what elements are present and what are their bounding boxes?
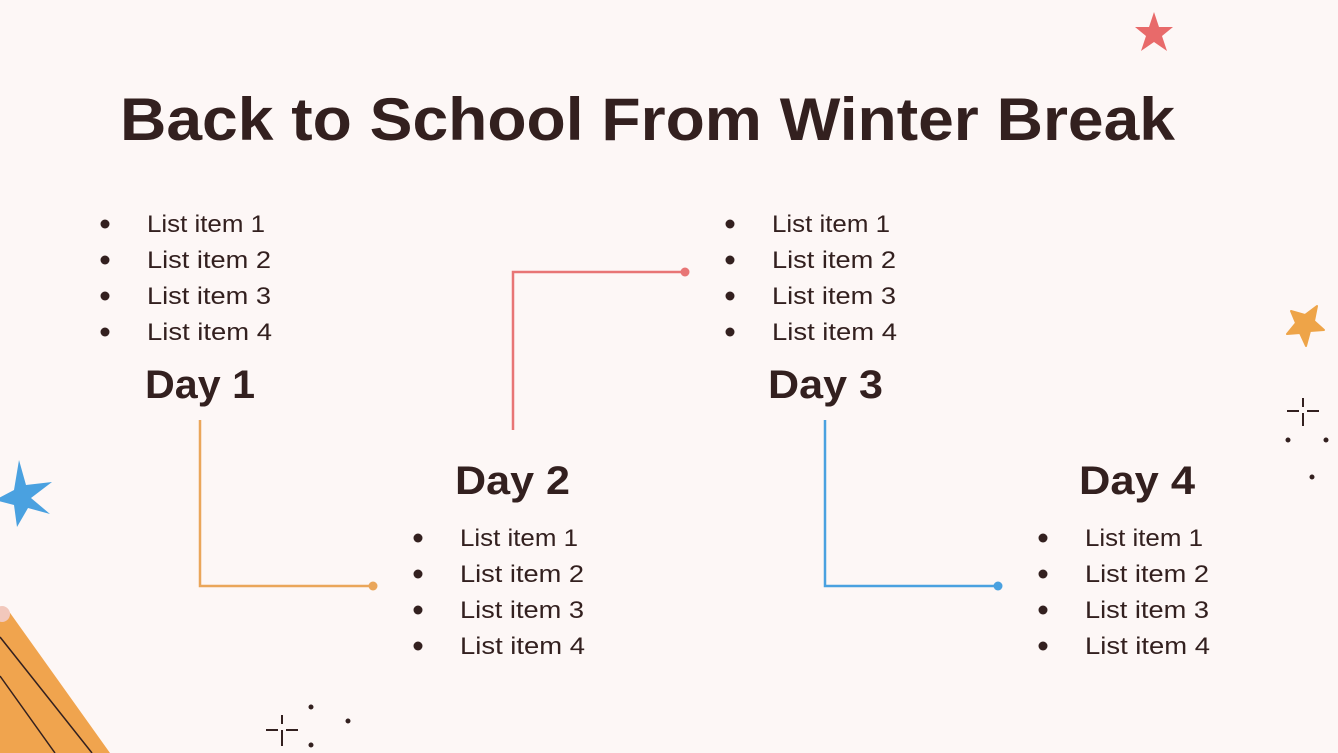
panel: day 3 [726,211,897,407]
panel: day 2: Day 2 [455,459,570,503]
panel: day 2: List item 4 [460,633,585,660]
connector: blue [825,420,1002,590]
panel: day 1: Day 1 [145,363,255,407]
panel: day 4: List item 3 [1085,597,1209,624]
panel: day 3: Day 3 [768,363,883,407]
panel: day 1: List item 1 [147,211,265,238]
panel: day 2: List item 1 [460,525,578,552]
panel: day 2: List item 2 [460,561,584,588]
panel: day 1: List item 4 [147,319,272,346]
panel: day 4: List item 4 [1085,633,1210,660]
connector: orange [200,420,378,590]
icon: blue star [0,460,52,527]
panel: day 3: List item 1 [772,211,890,238]
panel: day 3: List item 4 [772,319,897,346]
icon: sparkle bottom [266,706,350,746]
panel: day 4: List item 1 [1085,525,1203,552]
panel: day 4 [1038,459,1210,660]
title: Back to School From Winter Break [120,86,1176,153]
icon: pencil [0,606,110,753]
panel: day 1 [100,211,272,407]
connector: red [513,268,690,430]
panel: day 1: List item 3 [147,283,271,310]
panel: day 2: List item 3 [460,597,584,624]
panel: day 1: List item 2 [147,247,271,274]
icon: sparkle right [1286,398,1328,478]
panel: day 2 [414,459,585,660]
panel: day 3: List item 3 [772,283,896,310]
panel: day 4: Day 4 [1079,459,1196,503]
panel: day 4: List item 2 [1085,561,1209,588]
panel: day 3: List item 2 [772,247,896,274]
icon: red star [1135,12,1173,51]
icon: orange star [1287,306,1324,346]
